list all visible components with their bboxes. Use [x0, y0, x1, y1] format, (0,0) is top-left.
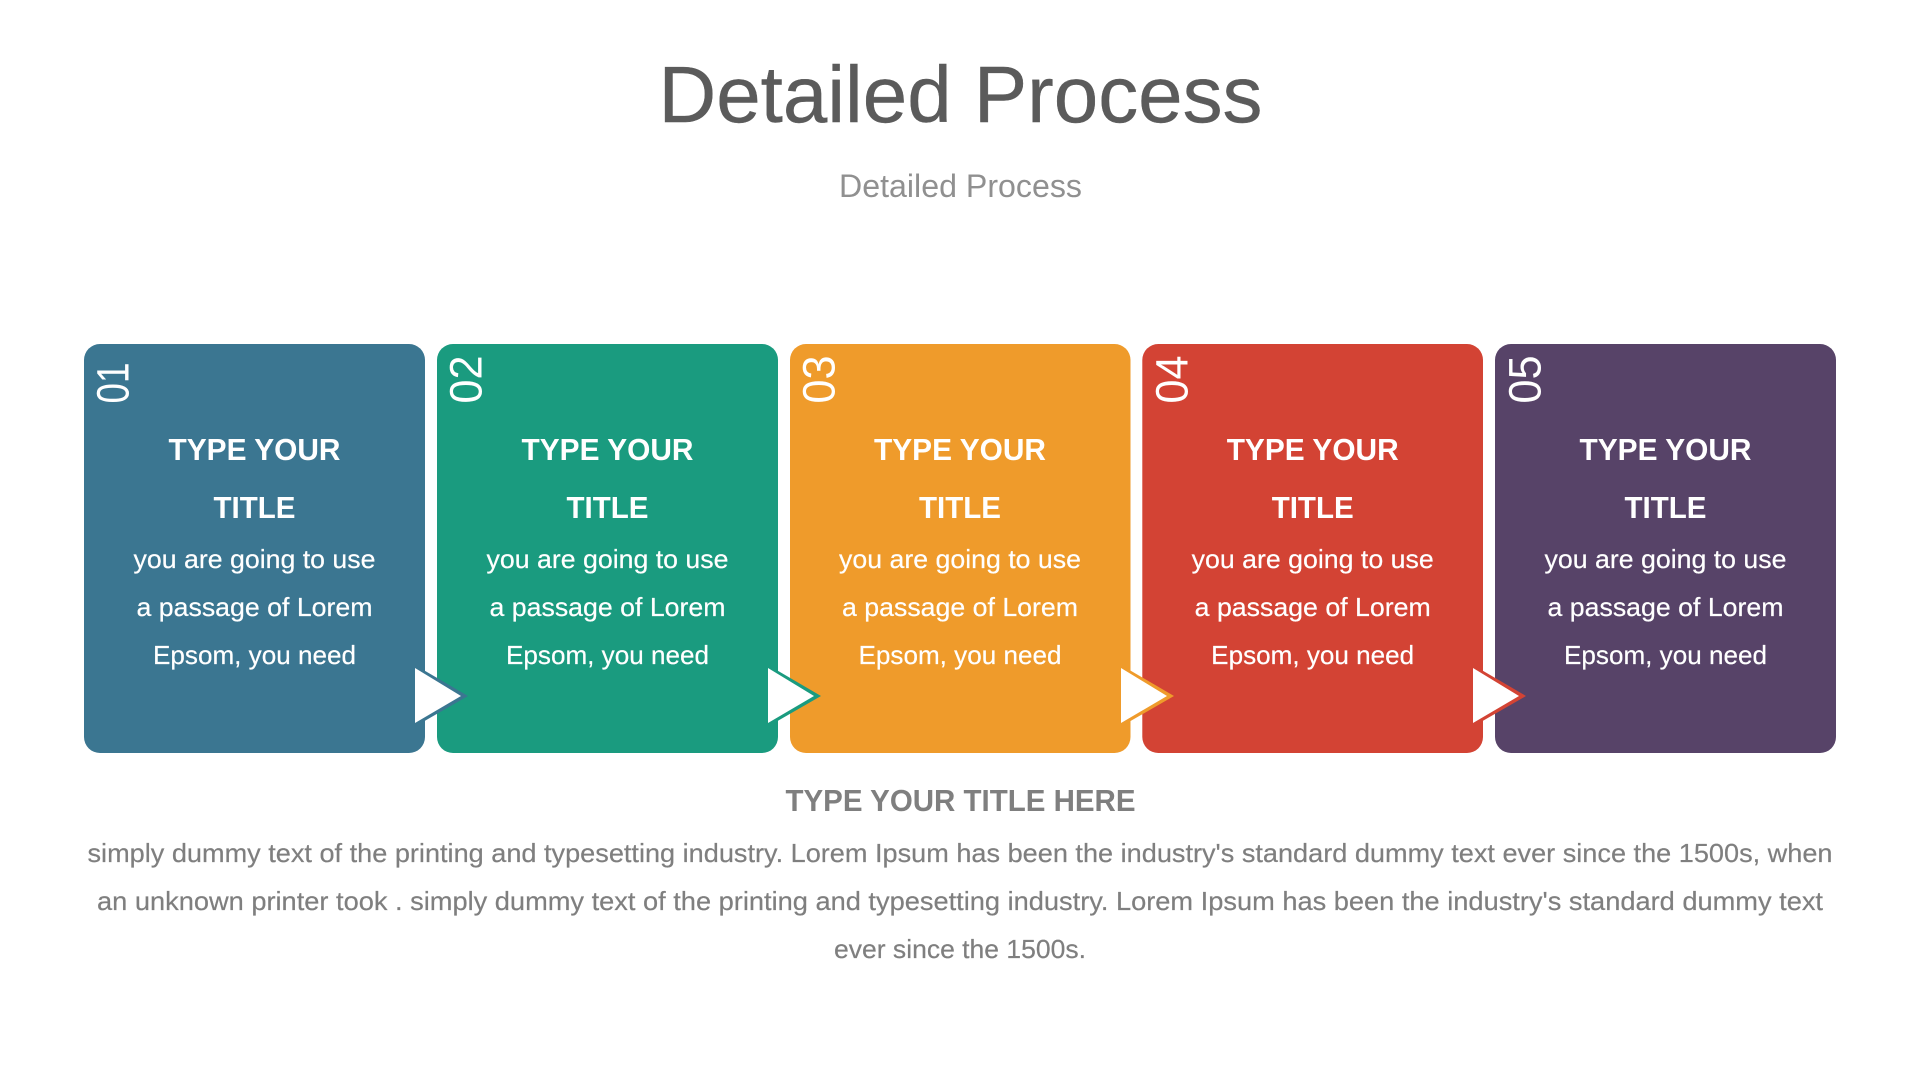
- step 03 heading: [874, 432, 1046, 525]
- number 03: 03: [794, 356, 844, 404]
- step 01 heading: [168, 432, 340, 525]
- step 05 text: you are going to use: [1544, 544, 1786, 574]
- arrow: step 01 to 02: [415, 665, 468, 726]
- panel: step 05: [1495, 344, 1836, 753]
- step 05 text: [1544, 544, 1786, 670]
- number 05: 05: [1500, 356, 1550, 404]
- step 05 heading: TYPE YOUR: [1580, 432, 1752, 467]
- step 02 text: Epsom, you need: [506, 640, 709, 670]
- step 03 text: a passage of Lorem: [842, 592, 1078, 622]
- step 02 text: [486, 544, 728, 670]
- step 01 text: Epsom, you need: [153, 640, 356, 670]
- bottom heading: TYPE YOUR TITLE HERE: [786, 783, 1136, 818]
- arrow: step 03 to 04: [1121, 665, 1174, 726]
- number 01: 01: [88, 362, 138, 404]
- step 05 text: a passage of Lorem: [1548, 592, 1784, 622]
- bottom description: an unknown printer took . simply dummy text of the printing and typesetting industry. Lorem Ipsum has been the industry's standard dummy text: [97, 886, 1824, 916]
- arrow: step 02 to 03: [768, 665, 821, 726]
- step 04 heading: TITLE: [1272, 490, 1354, 525]
- bottom description: [88, 838, 1833, 964]
- step 02 text: you are going to use: [486, 544, 728, 574]
- step 03 heading: TITLE: [919, 490, 1001, 525]
- step 04 heading: TYPE YOUR: [1227, 432, 1399, 467]
- step 02 text: a passage of Lorem: [490, 592, 726, 622]
- step 05 heading: [1580, 432, 1752, 525]
- step 04 text: a passage of Lorem: [1195, 592, 1431, 622]
- bottom description: simply dummy text of the printing and typesetting industry. Lorem Ipsum has been the industry's standard dummy text ever since the 1500s, when: [88, 838, 1833, 868]
- step 01 text: [134, 544, 376, 670]
- number 04: 04: [1146, 356, 1198, 404]
- step 01 text: you are going to use: [134, 544, 376, 574]
- step 03 heading: TYPE YOUR: [874, 432, 1046, 467]
- step 03 text: [839, 544, 1081, 670]
- step 02 heading: TITLE: [566, 490, 648, 525]
- number 02: 02: [440, 356, 492, 404]
- step 05 heading: TITLE: [1624, 490, 1706, 525]
- step 01 heading: TITLE: [214, 490, 296, 525]
- step 01 text: a passage of Lorem: [136, 592, 372, 622]
- panel: step 02: [437, 344, 778, 753]
- step 02 heading: TYPE YOUR: [522, 432, 694, 467]
- panel: step 04: [1142, 344, 1483, 753]
- step 02 heading: [522, 432, 694, 525]
- step 04 text: [1192, 544, 1434, 670]
- step 04 text: Epsom, you need: [1211, 640, 1414, 670]
- step 04 heading: [1227, 432, 1399, 525]
- arrow: step 04 to 05: [1473, 665, 1526, 726]
- subtitle: Detailed Process: [839, 168, 1082, 204]
- step 01 heading: TYPE YOUR: [168, 432, 340, 467]
- bottom description: ever since the 1500s.: [834, 934, 1086, 964]
- title: Detailed Process: [658, 50, 1262, 139]
- step 03 text: Epsom, you need: [858, 640, 1062, 670]
- panel: step 01: [84, 344, 425, 753]
- step 05 text: Epsom, you need: [1564, 640, 1767, 670]
- step 04 text: you are going to use: [1192, 544, 1434, 574]
- panel: step 03: [790, 344, 1130, 753]
- step 03 text: you are going to use: [839, 544, 1081, 574]
